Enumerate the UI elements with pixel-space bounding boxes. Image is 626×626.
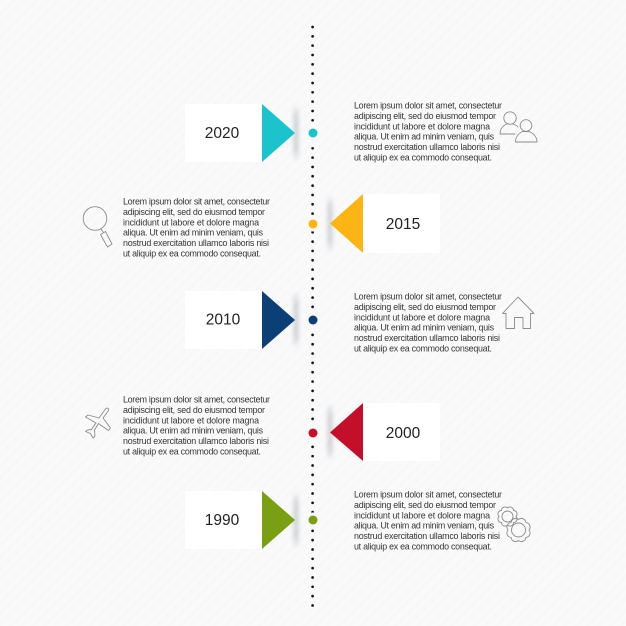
text block 2020: nostrud exercitation ullamco laboris nisi: [354, 142, 500, 152]
text block 2020: aliqua. Ut enim ad minim veniam, quis: [354, 132, 495, 142]
text block 2015: nostrud exercitation ullamco laboris nisi: [123, 238, 269, 248]
marker dot 2020: [308, 128, 318, 138]
text block 2010: nostrud exercitation ullamco laboris nisi: [354, 333, 500, 343]
text block 2010: ut aliquip ex ea commodo consequat.: [354, 344, 492, 354]
marker 2020: [306, 126, 320, 140]
arrow shadow 2015: [328, 201, 332, 247]
text block 1990: incididunt ut labore et dolore magna: [354, 510, 490, 520]
text block 2010: aliqua. Ut enim ad minim veniam, quis: [354, 323, 495, 333]
text block 2015: adipiscing elit, sed do eiusmod tempor: [123, 207, 265, 217]
text block 2020: ut aliquip ex ea commodo consequat.: [354, 152, 492, 162]
text block 2015: incididunt ut labore et dolore magna: [123, 217, 259, 227]
year box 2010: [185, 291, 262, 349]
text block 2020: Lorem ipsum dolor sit amet, consectetur: [354, 100, 502, 110]
text block 2010: Lorem ipsum dolor sit amet, consectetur: [354, 292, 502, 302]
arrow 1990: [262, 491, 295, 549]
text block 2000: adipiscing elit, sed do eiusmod tempor: [123, 405, 265, 415]
timeline entry: 2010: [185, 291, 320, 349]
text block 2015: Lorem ipsum dolor sit amet, consectetur: [123, 196, 270, 206]
icon: house: [502, 297, 534, 328]
text block 2015: ut aliquip ex ea commodo consequat.: [123, 248, 261, 258]
year box 2000: [363, 403, 440, 461]
year label 2020: 2020: [205, 125, 240, 142]
text block 2015: aliqua. Ut enim ad minim veniam, quis: [123, 228, 264, 238]
arrow 2000: [330, 403, 363, 461]
text block 2000: nostrud exercitation ullamco laboris nisi: [123, 436, 269, 446]
text block 2020: incididunt ut labore et dolore magna: [354, 121, 490, 131]
timeline dotted line: [311, 27, 314, 606]
marker dot 2000: [308, 428, 318, 438]
text block 1990: aliqua. Ut enim ad minim veniam, quis: [354, 521, 495, 531]
text block 2000: Lorem ipsum dolor sit amet, consectetur: [123, 394, 270, 404]
text block 1990: nostrud exercitation ullamco laboris nisi: [354, 531, 500, 541]
text block 1990: ut aliquip ex ea commodo consequat.: [354, 542, 492, 552]
icon: people: [500, 112, 537, 142]
timeline entry: 2000: [306, 403, 440, 461]
marker dot 1990: [308, 516, 318, 524]
marker dot 2015: [308, 220, 318, 228]
marker dot 2010: [308, 316, 318, 324]
timeline entry: 1990: [185, 491, 320, 549]
icon: magnifying glass: [83, 207, 112, 247]
timeline entry: 2020: [185, 104, 320, 162]
text block 1990: adipiscing elit, sed do eiusmod tempor: [354, 500, 496, 510]
text block 2000: incididunt ut labore et dolore magna: [123, 415, 259, 425]
text block 1990: Lorem ipsum dolor sit amet, consectetur: [354, 490, 502, 500]
marker 2015: [306, 216, 320, 232]
year label 2010: 2010: [206, 312, 241, 328]
year label 1990: 1990: [205, 512, 240, 529]
text block 2000: aliqua. Ut enim ad minim veniam, quis: [123, 426, 264, 436]
arrow shadow 2000: [328, 409, 332, 455]
arrow 2015: [330, 194, 363, 253]
year box 2015: [363, 194, 440, 253]
marker 2010: [306, 312, 320, 328]
icon: airplane: [86, 408, 110, 438]
arrow shadow 2020: [294, 110, 298, 156]
marker 1990: [306, 512, 320, 528]
arrow shadow 1990: [294, 497, 298, 543]
arrow 2020: [262, 104, 295, 162]
arrow 2010: [262, 291, 295, 349]
text block 2010: adipiscing elit, sed do eiusmod tempor: [354, 302, 496, 312]
text block 2010: incididunt ut labore et dolore magna: [354, 312, 490, 322]
marker 2000: [306, 426, 320, 440]
text block 2000: ut aliquip ex ea commodo consequat.: [123, 446, 261, 456]
year box 1990: [185, 491, 262, 549]
year label 2000: 2000: [386, 425, 421, 442]
timeline entry: 2015: [306, 194, 440, 253]
year label 2015: 2015: [386, 216, 420, 233]
arrow shadow 2010: [294, 297, 298, 343]
text block 2020: adipiscing elit, sed do eiusmod tempor: [354, 111, 496, 121]
icon: gears: [498, 507, 530, 542]
year box 2020: [185, 104, 262, 162]
